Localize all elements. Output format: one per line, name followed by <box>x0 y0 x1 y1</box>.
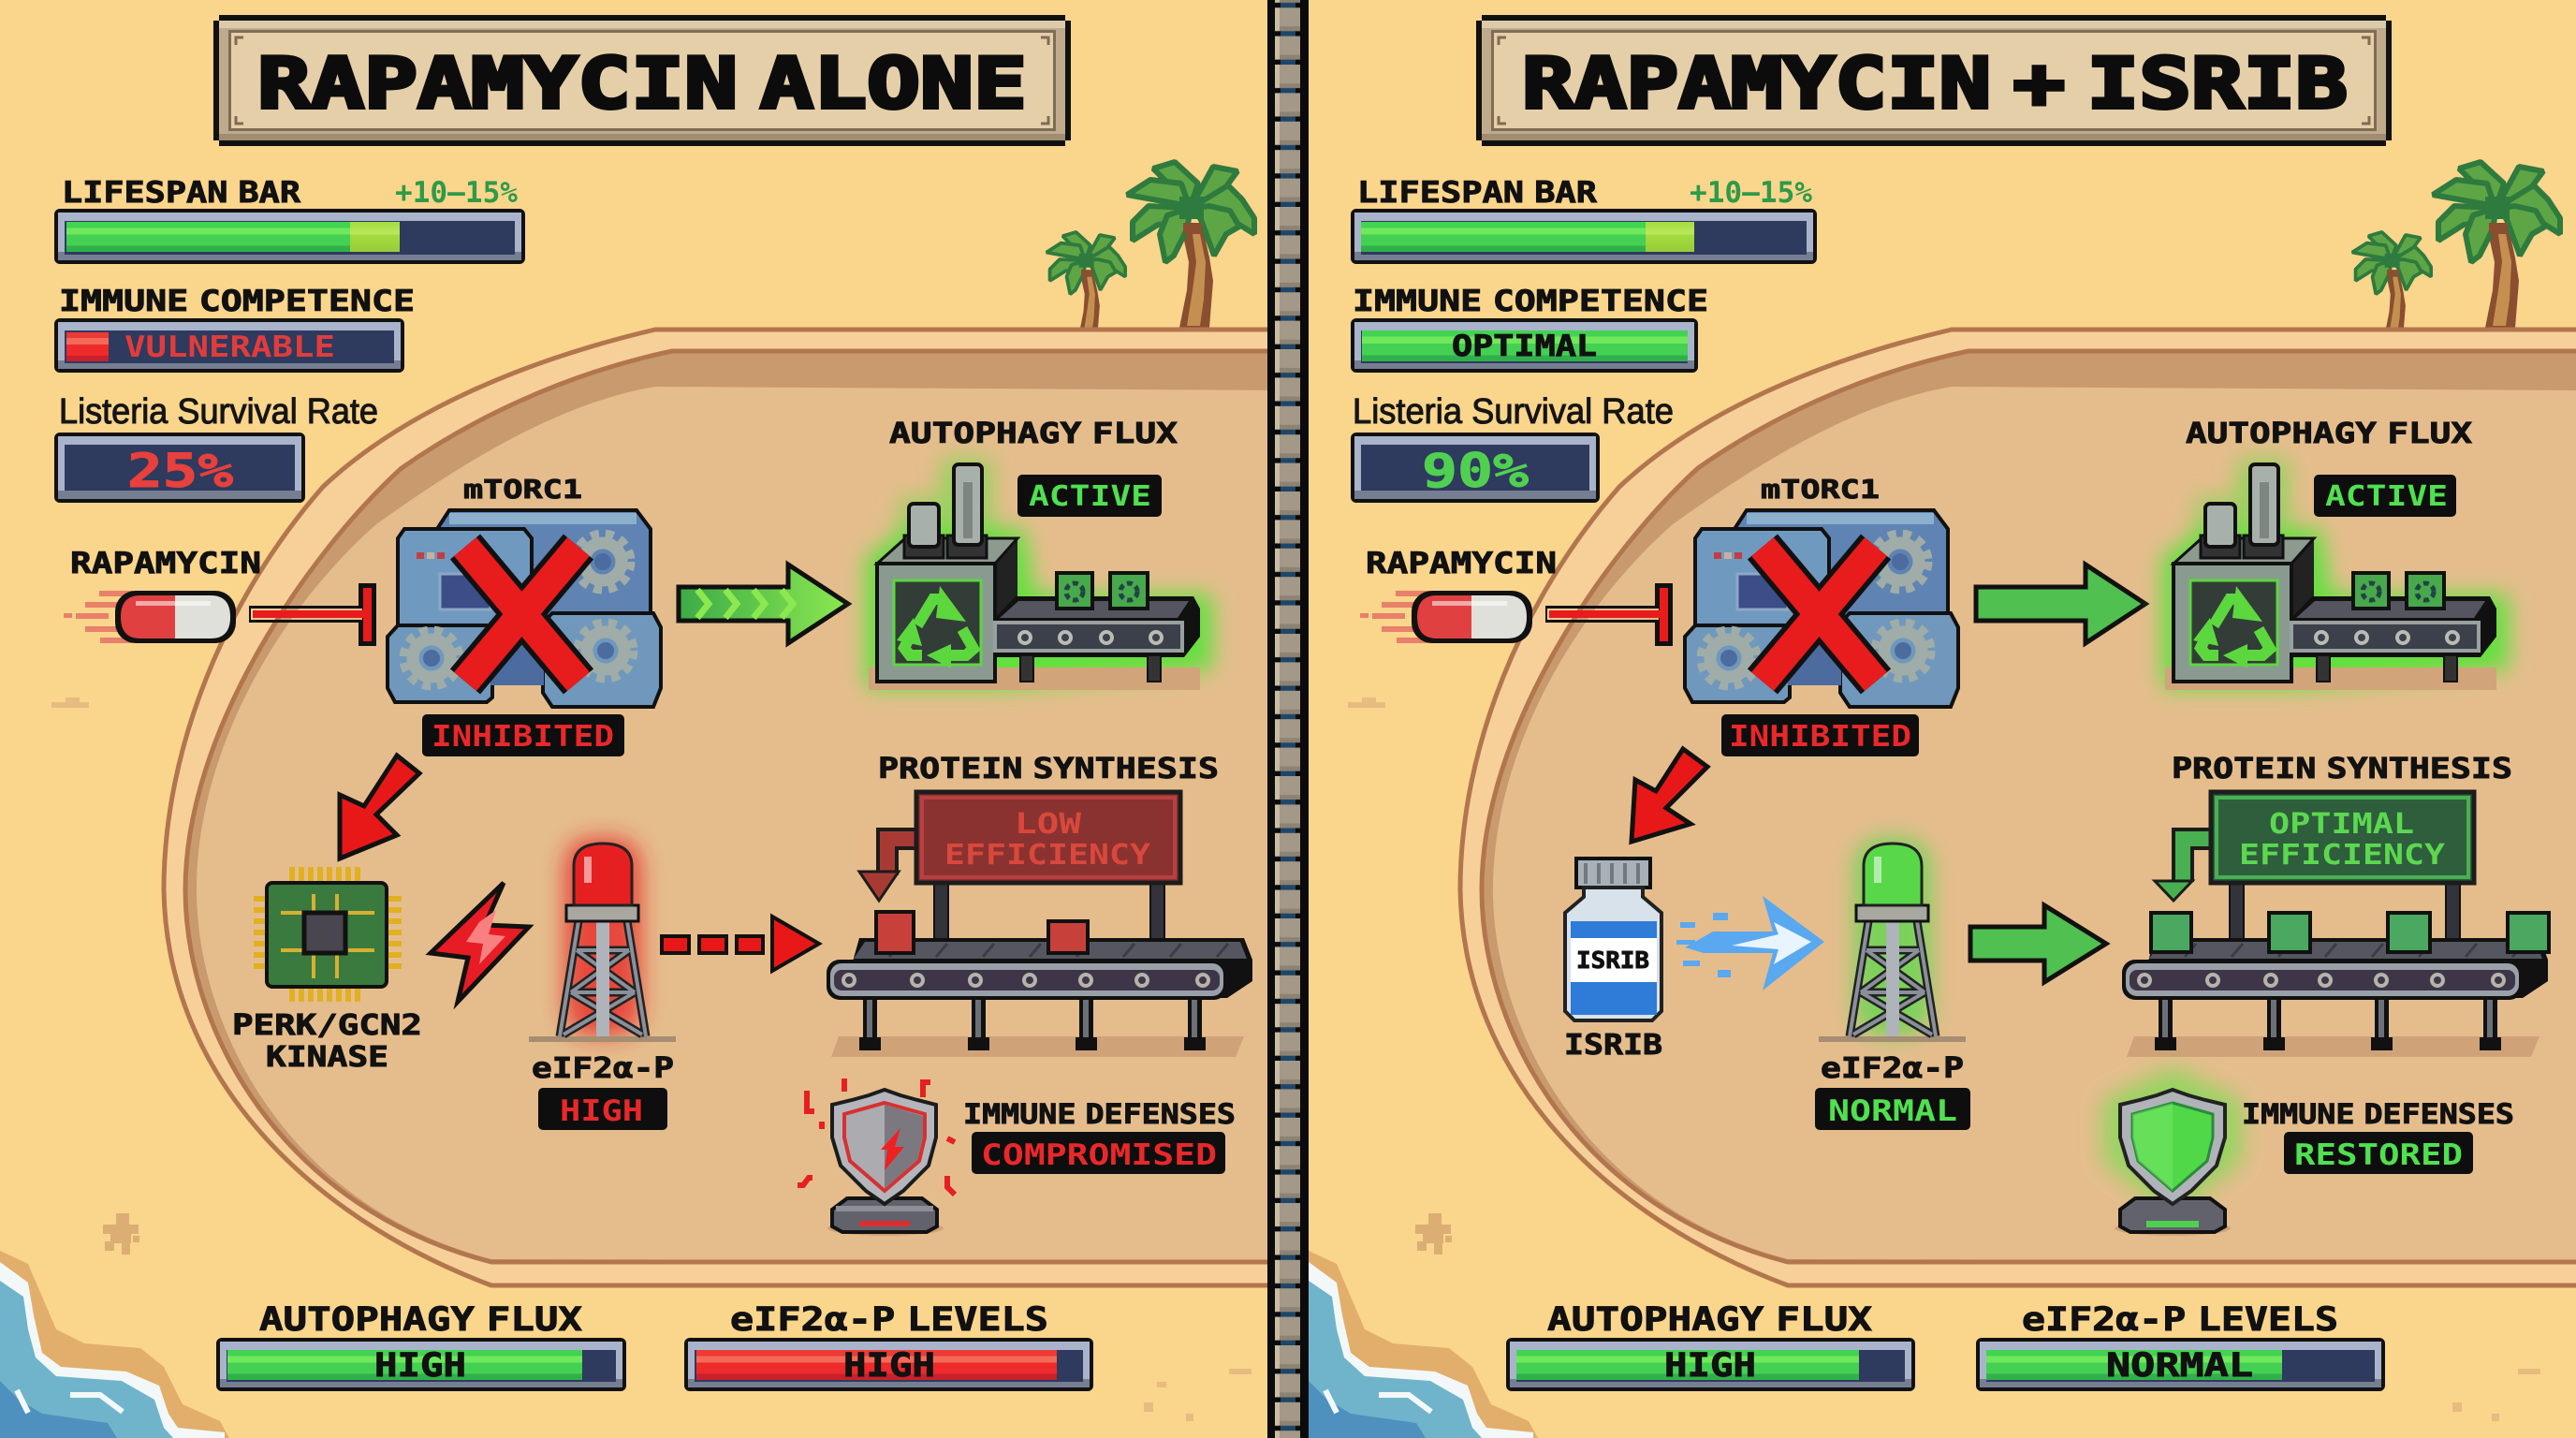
lifespan bar <box>54 176 525 264</box>
island left <box>164 330 1282 1285</box>
bottom bar: autophagy flux: AUTOPHAGY FLUX <box>1547 1301 1872 1339</box>
bottom bar: autophagy flux: AUTOPHAGY FLUX <box>259 1301 582 1339</box>
listeria survival rate: 90% <box>1422 444 1529 498</box>
arrow: red to kinase <box>340 756 419 858</box>
lifespan bar: +10–15% <box>1690 176 1812 210</box>
arrow: green to conveyor <box>1970 905 2106 982</box>
listeria survival rate <box>1351 392 1674 503</box>
icon: PERK/GCN2 chip: KINASE <box>266 1041 388 1074</box>
icon: restored shield <box>2103 1067 2242 1236</box>
rapamycin pill and inhibitor: RAPAMYCIN <box>1366 547 1557 580</box>
protein synthesis conveyor with low efficiency sign: LOW <box>1015 808 1082 841</box>
icon: ISRIB vial: ISRIB <box>1564 1029 1662 1062</box>
bottom bar: eIF2a-P levels: eIF2α-P LEVELS <box>730 1301 1048 1339</box>
immune defenses status: IMMUNE DEFENSES <box>963 1098 1236 1130</box>
icon: blue burst arrow <box>1676 896 1824 990</box>
protein synthesis conveyor with optimal efficiency sign: PROTEIN SYNTHESIS <box>2172 753 2512 785</box>
rapamycin pill and inhibitor <box>1360 547 1673 646</box>
badge: inhibited: INHIBITED <box>432 720 614 754</box>
immune competence bar: OPTIMAL <box>1452 330 1597 363</box>
immune competence bar: VULNERABLE <box>124 330 335 364</box>
mTORC1 machine <box>1685 474 1958 707</box>
listeria survival rate: 25% <box>127 444 233 498</box>
title: rapamycin alone <box>213 15 1071 146</box>
badge: active <box>1017 475 1162 517</box>
listeria survival rate <box>54 392 378 503</box>
bottom bar: autophagy flux <box>1506 1301 1915 1391</box>
bottom bar: eIF2a-P levels: eIF2α-P LEVELS <box>2022 1301 2338 1339</box>
lifespan bar <box>1351 176 1817 264</box>
bottom bar: eIF2a-P levels <box>684 1301 1093 1391</box>
water right <box>1309 1251 1538 1438</box>
lifespan bar: LIFESPAN BAR <box>62 176 300 210</box>
immune defenses status: RESTORED <box>2294 1138 2463 1172</box>
rapamycin pill and inhibitor: RAPAMYCIN <box>70 547 261 580</box>
immune defenses status: IMMUNE DEFENSES <box>2242 1098 2514 1130</box>
listeria survival rate: Listeria Survival Rate <box>1353 392 1674 432</box>
immune competence bar <box>54 285 415 373</box>
panel: rapamycin + isrib <box>1351 15 2549 1391</box>
palm trees left <box>1046 162 1254 335</box>
arrow: red to isrib <box>1632 749 1707 842</box>
bottom bar: eIF2a-P levels <box>1976 1301 2385 1391</box>
icon: compromised shield <box>798 1078 955 1236</box>
lifespan bar: LIFESPAN BAR <box>1357 176 1597 210</box>
immune competence bar <box>1351 285 1708 373</box>
protein synthesis conveyor with optimal efficiency sign: EFFICIENCY <box>2239 839 2445 872</box>
tower: eIF2a-P high: HIGH <box>560 1094 643 1128</box>
bottom bar: eIF2a-P levels: NORMAL <box>2106 1347 2253 1385</box>
icon: PERK/GCN2 chip: PERK/GCN2 <box>232 1009 422 1042</box>
badge: active: ACTIVE <box>2325 480 2448 513</box>
title: rapamycin alone: RAPAMYCIN ALONE <box>257 42 1027 125</box>
protein synthesis conveyor with low efficiency sign: PROTEIN SYNTHESIS <box>878 753 1219 785</box>
mTORC1 machine: mTORC1 <box>1761 474 1880 505</box>
palm trees right <box>2352 162 2560 335</box>
badge: active: ACTIVE <box>1029 480 1151 513</box>
sand details <box>51 697 2540 1421</box>
center divider <box>1267 0 1309 1438</box>
autophagy flux factory <box>2162 418 2509 690</box>
badge: inhibited: INHIBITED <box>1729 720 1911 754</box>
tower: eIF2a-P high: eIF2α-P <box>532 1052 674 1085</box>
title: rapamycin + isrib <box>1476 15 2392 146</box>
bottom bar: autophagy flux <box>216 1301 626 1391</box>
immune defenses status <box>2242 1098 2514 1174</box>
immune defenses status: COMPROMISED <box>981 1138 1217 1172</box>
icon: ISRIB vial <box>1564 858 1662 1062</box>
autophagy flux factory: AUTOPHAGY FLUX <box>889 418 1178 450</box>
title: rapamycin + isrib: RAPAMYCIN + ISRIB <box>1522 42 2348 125</box>
immune defenses status <box>963 1098 1236 1174</box>
island right <box>1460 330 2576 1285</box>
lifespan bar: +10–15% <box>395 176 518 210</box>
badge: active <box>2314 475 2456 517</box>
autophagy flux factory <box>866 418 1212 690</box>
badge: inhibited <box>422 714 624 756</box>
tower: eIF2a-P normal <box>1815 838 1970 1130</box>
tower: eIF2a-P normal: NORMAL <box>1828 1094 1957 1128</box>
panel: rapamycin alone <box>54 15 1252 1391</box>
arrow: chevron to autophagy <box>679 565 848 643</box>
icon: ISRIB vial: ISRIB <box>1576 946 1649 974</box>
immune competence bar: IMMUNE COMPETENCE <box>59 285 415 318</box>
bottom bar: autophagy flux: HIGH <box>374 1347 466 1385</box>
rapamycin pill and inhibitor <box>64 547 376 646</box>
tower: eIF2a-P high <box>529 838 676 1130</box>
protein synthesis conveyor with low efficiency sign: EFFICIENCY <box>944 839 1150 872</box>
mTORC1 machine: mTORC1 <box>463 474 582 505</box>
arrow: dashed red <box>662 917 819 971</box>
icon: PERK/GCN2 chip <box>232 867 422 1074</box>
protein synthesis conveyor with low efficiency sign <box>827 753 1252 1057</box>
mTORC1 machine <box>388 474 661 707</box>
badge: inhibited <box>1721 714 1919 756</box>
arrow: green to autophagy <box>1976 565 2145 643</box>
immune competence bar: IMMUNE COMPETENCE <box>1353 285 1708 318</box>
listeria survival rate: Listeria Survival Rate <box>59 392 378 432</box>
water left <box>0 1251 229 1438</box>
bottom bar: eIF2a-P levels: HIGH <box>843 1347 935 1385</box>
icon: lightning bolt <box>431 883 529 1002</box>
protein synthesis conveyor with optimal efficiency sign: OPTIMAL <box>2269 808 2414 841</box>
tower: eIF2a-P normal: eIF2α-P <box>1821 1052 1964 1085</box>
autophagy flux factory: AUTOPHAGY FLUX <box>2186 418 2472 450</box>
bottom bar: autophagy flux: HIGH <box>1664 1347 1756 1385</box>
protein synthesis conveyor with optimal efficiency sign <box>2122 753 2549 1057</box>
